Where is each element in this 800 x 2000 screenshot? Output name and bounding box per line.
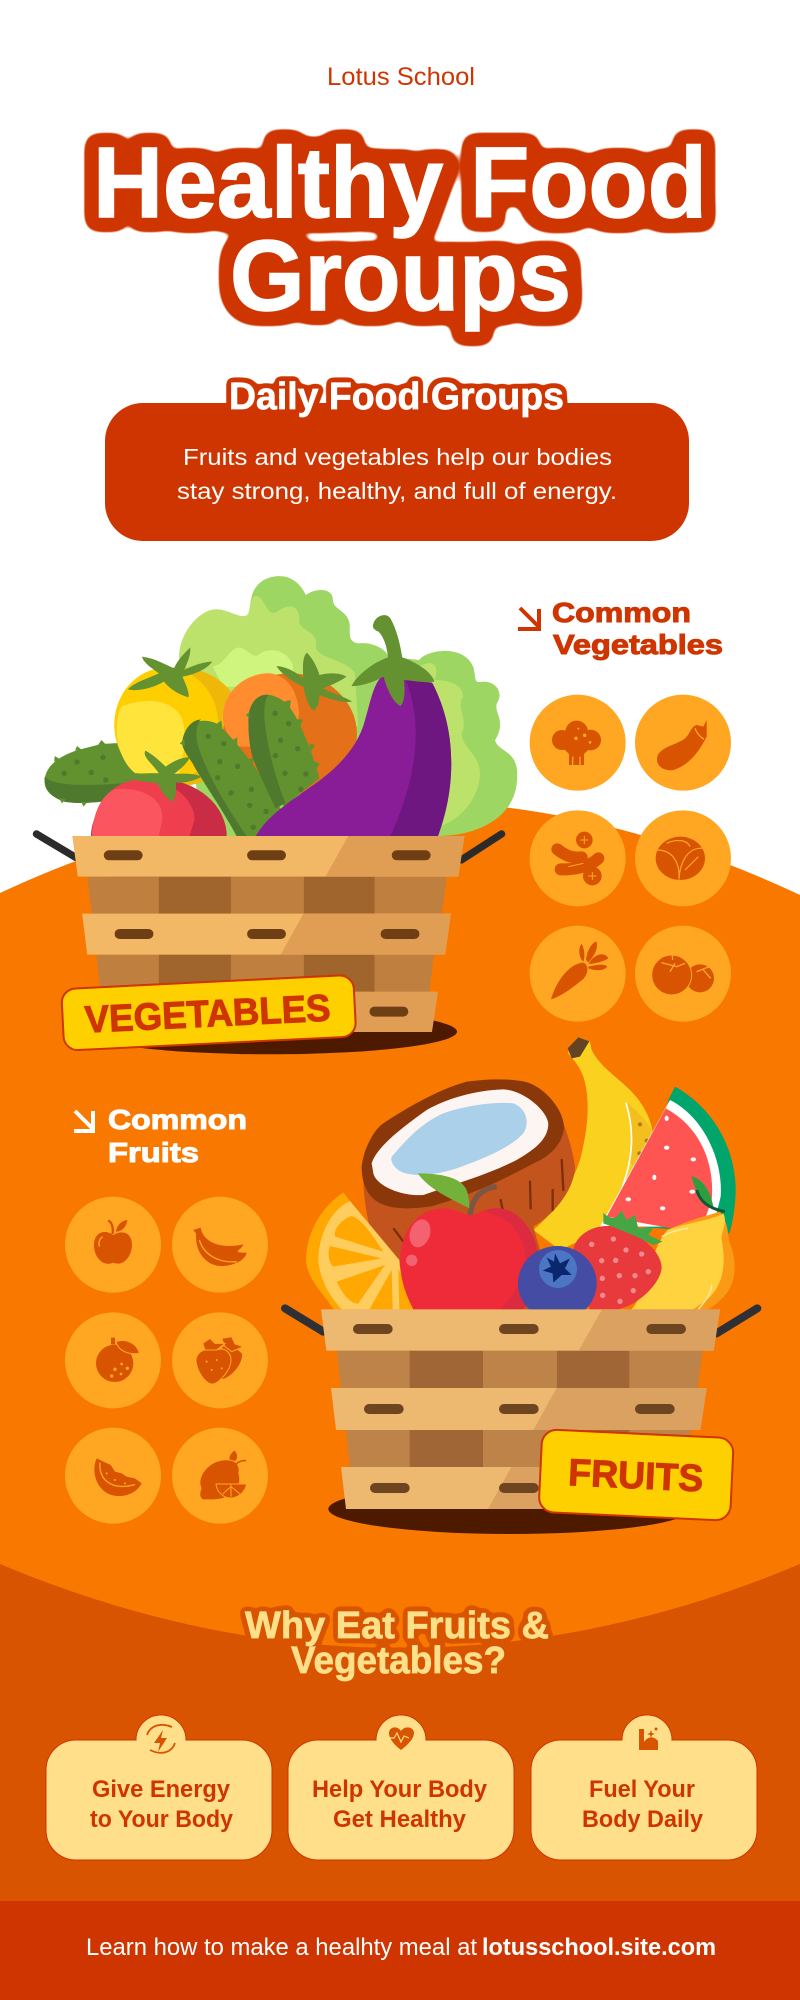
heading: why eat fruits and vegetables bbox=[245, 1605, 549, 1682]
heading: common vegetables bbox=[518, 597, 723, 660]
icon: carrot bbox=[530, 926, 626, 1022]
orange slice bbox=[306, 1192, 413, 1309]
icon: banana bbox=[172, 1197, 268, 1293]
vegetable icons bbox=[530, 695, 731, 1022]
arrow bbox=[74, 1111, 93, 1131]
heading: common vegetables: Common bbox=[552, 597, 691, 628]
card text bbox=[582, 1776, 704, 1833]
panel: daily food groups bbox=[105, 376, 689, 541]
panel text: Fruits and vegetables help our bodies bbox=[183, 444, 612, 470]
orange tomato bbox=[223, 653, 357, 795]
panel text: stay strong, healthy, and full of energy. bbox=[177, 478, 617, 504]
red tomato bbox=[91, 779, 227, 894]
icon: strawberries bbox=[172, 1312, 268, 1408]
shadow bbox=[328, 1484, 692, 1534]
label: vegetables bbox=[61, 975, 356, 1051]
watermelon bbox=[600, 1087, 736, 1233]
footer band bbox=[0, 1901, 800, 2000]
icon: orange bbox=[65, 1312, 161, 1408]
fruit icons bbox=[65, 1197, 268, 1524]
icon: muscle bbox=[639, 1728, 658, 1750]
icon: heart bbox=[386, 1727, 414, 1750]
handles bbox=[37, 834, 502, 860]
icon: cucumber bbox=[530, 810, 626, 906]
arrow bbox=[518, 608, 539, 629]
heading: daily food groups: Daily Food Groups bbox=[229, 376, 564, 418]
heading: common fruits bbox=[74, 1104, 247, 1168]
card: help your body bbox=[288, 1715, 514, 1860]
label: fruits bbox=[538, 1429, 734, 1521]
icon: lemon bbox=[172, 1428, 268, 1524]
card: give energy bbox=[46, 1715, 272, 1860]
footer text bbox=[86, 1934, 716, 1961]
orange background curve bbox=[0, 800, 800, 1720]
title: Groups bbox=[230, 220, 571, 332]
basket slats bbox=[321, 1309, 720, 1509]
yellow tomato bbox=[114, 647, 243, 786]
title bbox=[93, 127, 707, 332]
dark orange lower section bbox=[0, 1564, 800, 1901]
blueberry bbox=[518, 1246, 597, 1321]
label: vegetables: VEGETABLES bbox=[84, 987, 332, 1042]
apple bbox=[400, 1173, 539, 1309]
shadow bbox=[84, 1009, 457, 1054]
lemon bbox=[632, 1176, 735, 1309]
card text bbox=[90, 1776, 234, 1833]
icon: energy bbox=[147, 1725, 175, 1753]
title: Healthy Food bbox=[93, 127, 707, 239]
lettuce bbox=[179, 576, 517, 836]
eggplant bbox=[256, 615, 451, 836]
heading: why eat fruits and vegetables: Why Eat Fruits & bbox=[245, 1605, 549, 1647]
fruit basket illustration bbox=[285, 1037, 757, 1534]
icon: tomatoes bbox=[635, 926, 731, 1022]
icon: apple bbox=[65, 1197, 161, 1293]
icon: eggplant bbox=[635, 695, 731, 791]
school name: Lotus School bbox=[327, 63, 475, 91]
card: fuel your body bbox=[531, 1715, 757, 1860]
heading: why eat fruits and vegetables: Vegetables? bbox=[291, 1640, 506, 1682]
card text: Give Energy bbox=[92, 1776, 231, 1803]
card text: to Your Body bbox=[90, 1806, 234, 1833]
heading: common fruits: Fruits bbox=[108, 1137, 199, 1168]
vegetable basket illustration bbox=[37, 576, 517, 1054]
icon: watermelon bbox=[65, 1428, 161, 1524]
footer text: lotusschool.site.com bbox=[482, 1934, 716, 1961]
label: fruits: FRUITS bbox=[567, 1452, 704, 1500]
coconut bbox=[362, 1079, 575, 1309]
icon: cabbage bbox=[635, 810, 731, 906]
panel text bbox=[177, 444, 617, 504]
heading: common vegetables: Vegetables bbox=[553, 629, 723, 660]
card text: Help Your Body bbox=[312, 1776, 488, 1803]
cucumbers bbox=[122, 695, 319, 836]
strawberry bbox=[573, 1211, 663, 1309]
handles bbox=[285, 1308, 757, 1333]
left cucumber bbox=[45, 740, 149, 807]
card text: Body Daily bbox=[582, 1806, 704, 1833]
card text: Get Healthy bbox=[333, 1806, 467, 1833]
icon: broccoli bbox=[530, 695, 626, 791]
footer text: Learn how to make a healhty meal at bbox=[86, 1934, 477, 1961]
basket slats bbox=[72, 836, 464, 1032]
heading: common fruits: Common bbox=[108, 1104, 247, 1135]
card text bbox=[312, 1776, 488, 1833]
card text: Fuel Your bbox=[589, 1776, 695, 1803]
banana bbox=[533, 1037, 653, 1250]
